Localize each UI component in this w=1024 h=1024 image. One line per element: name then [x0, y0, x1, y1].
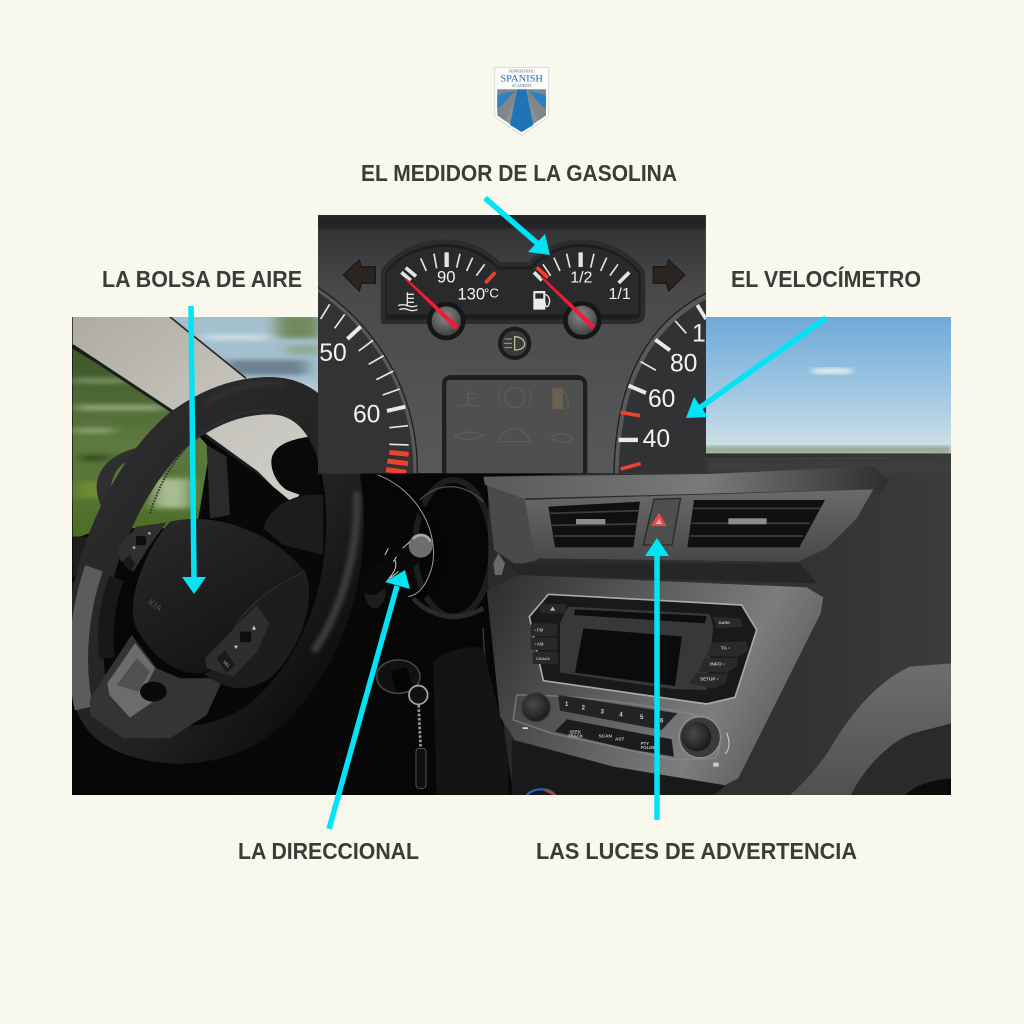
arrow: las luces de advertencia — [645, 538, 669, 820]
gauge pod — [381, 242, 643, 340]
icon: ignition and keychain — [377, 660, 428, 788]
preset and tuning controls: TRACK — [568, 733, 584, 738]
right radio buttons — [689, 617, 748, 689]
arrow: la direccional — [329, 570, 410, 829]
preset and tuning controls: 1 — [565, 702, 569, 708]
door below side window — [72, 536, 88, 576]
right steering wheel controls — [205, 605, 269, 677]
mirror bracket — [96, 448, 136, 506]
left air vent — [548, 502, 640, 547]
right speedometer dial — [614, 292, 719, 475]
left radio buttons: CD/AUX — [536, 657, 551, 661]
gauge labels: 1/2 — [570, 269, 593, 286]
logo: Homeschool Spanish Academy shield: HOMESCHOOL — [509, 70, 535, 74]
airbag cover on hub — [133, 519, 305, 673]
radio unit — [529, 594, 757, 704]
preset and tuning controls: 5 — [640, 715, 644, 721]
icon: headlight switch — [498, 327, 531, 360]
right radio buttons: SETUP › — [700, 677, 719, 682]
steering wheel rim — [79, 383, 357, 745]
inset: instrument cluster close-up — [0, 215, 719, 687]
trim flank left of vents — [487, 482, 537, 565]
icon: coolant temperature — [398, 292, 417, 311]
dark band under vents — [510, 563, 817, 583]
fuel gauge ticks — [534, 252, 629, 283]
lower knee panel — [433, 647, 509, 795]
right radio buttons: INFO › — [710, 661, 725, 667]
gauge labels: 90 — [437, 268, 456, 287]
left radio buttons: ‹ AM — [534, 641, 544, 646]
left speedometer dial — [0, 253, 417, 687]
right speedometer dial: 60 — [648, 386, 675, 413]
logo: Homeschool Spanish Academy shield: SPANISH — [500, 73, 544, 83]
car interior photo illustration — [72, 315, 952, 797]
left speedometer dial: 60 — [353, 401, 380, 428]
temperature gauge ticks — [401, 252, 485, 280]
left steering wheel controls — [118, 522, 167, 572]
preset and tuning controls: 6 — [660, 719, 664, 725]
heading: el velocímetro: EL VELOCÍMETRO — [731, 265, 921, 292]
right speedometer dial: 10 — [692, 321, 719, 348]
left part of photo: side window, pillar and steering wheel — [73, 315, 509, 795]
right part of photo: dashboard — [483, 453, 952, 797]
A-pillar — [73, 317, 318, 505]
sky through windshield — [700, 317, 951, 457]
side window green blur — [73, 348, 210, 537]
below console shadow — [512, 740, 725, 797]
right knob — [679, 717, 721, 758]
preset and tuning controls: PTY — [641, 741, 649, 746]
horn logo: KIA — [146, 597, 165, 614]
top dash trim — [483, 467, 889, 498]
logo: Homeschool Spanish Academy shield — [495, 67, 549, 135]
preset and tuning controls: SEEK — [569, 729, 582, 734]
arrow: el velocímetro — [686, 318, 826, 418]
arrow: la bolsa de aire — [182, 306, 206, 594]
radio display — [575, 628, 682, 686]
panel: centre console — [487, 575, 823, 785]
gauge labels: 1/1 — [609, 286, 631, 303]
needle hubs — [427, 301, 602, 340]
dark interior behind wheel — [248, 468, 289, 502]
preset and tuning controls: 4 — [619, 713, 623, 719]
left speedometer dial: 50 — [319, 340, 347, 367]
heading: la bolsa de aire: LA BOLSA DE AIRE — [102, 266, 302, 292]
icon: turn signal stalk — [364, 534, 433, 608]
right hub section — [203, 572, 309, 688]
lower climate dial — [527, 789, 555, 795]
gauge labels: °C — [484, 286, 499, 301]
lower dash light panel — [788, 663, 952, 797]
left radio buttons — [531, 604, 566, 664]
preset and tuning controls: SCAN — [599, 733, 612, 738]
arrow: el medidor de la gasolina — [485, 198, 550, 255]
heading: las luces de advertencia: LAS LUCES DE ADVERTENCIA — [536, 838, 857, 864]
preset and tuning controls: FOLDER — [641, 745, 659, 750]
right radio buttons: TA › — [721, 645, 730, 651]
gauge labels — [437, 268, 631, 304]
windshield left blur — [172, 317, 318, 393]
dashboard top surface — [488, 453, 952, 797]
right radio buttons: DARK — [719, 620, 730, 625]
right speedometer dial: 40 — [643, 426, 670, 453]
icon: hazard button — [643, 498, 681, 545]
preset and tuning controls: AST — [615, 737, 624, 742]
logo: Homeschool Spanish Academy shield: ACADEMY — [512, 83, 532, 88]
heading: el medidor de la gasolina: EL MEDIDOR DE LA GASOLINA — [361, 160, 677, 186]
small chrome vent tab — [493, 553, 505, 575]
heading: la direccional: LA DIRECCIONAL — [238, 838, 419, 864]
icon: fuel pump — [533, 291, 550, 310]
right steering wheel controls: SEL — [222, 659, 232, 669]
turn signal arrows — [343, 260, 685, 291]
instrument binnacle — [373, 474, 507, 738]
preset and tuning controls: 2 — [582, 705, 586, 711]
left knob — [522, 693, 550, 722]
preset and tuning controls: 3 — [601, 709, 605, 715]
lower spoke — [90, 635, 223, 738]
needles — [405, 276, 595, 330]
left radio buttons: ‹ FM — [534, 627, 544, 632]
right speedometer dial: 80 — [670, 351, 697, 378]
warning light display — [442, 375, 587, 475]
gauge labels: 130 — [457, 285, 485, 304]
panel: air vents and hazard — [525, 489, 873, 562]
preset and tuning controls — [513, 693, 729, 767]
right air vent — [687, 500, 825, 547]
